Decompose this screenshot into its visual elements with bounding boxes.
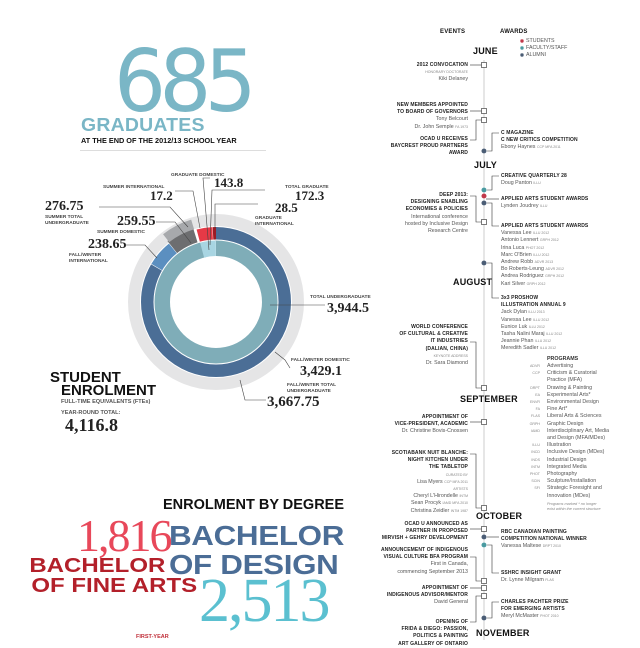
programs legend: FLAS: [531, 414, 540, 418]
heading: student enrolment: FULL-TIME EQUIVALENTS (FTEs): [61, 399, 150, 405]
award: creative quarterly: CREATIVE QUARTERLY 28: [501, 173, 567, 179]
value: fall/winter total undergraduate: [267, 382, 336, 410]
label: bachelor of design: OF DESIGN: [169, 549, 338, 580]
event: board of governors: TO BOARD OF GOVERNORS: [397, 109, 468, 115]
event: deep 2013: International conference: [411, 214, 468, 220]
award: 3x3 proshow: [501, 295, 566, 351]
award: sshrc: [501, 570, 562, 583]
award: applied arts 2: Irina Luca PHOT 2012: [501, 245, 544, 251]
label: first-year: FIRST-YEAR: [136, 634, 169, 640]
award: 3x3 proshow: Jack Dylan ILLU 2013: [501, 309, 545, 315]
event: nuit blanche: Cheryl L'Hirondelle INTM: [413, 493, 468, 499]
event: nuit blanche: SCOTIABANK NUIT BLANCHE:: [392, 450, 468, 456]
value: summer international: 17.2: [150, 188, 173, 203]
event: nuit blanche: NIGHT KITCHEN UNDER: [408, 457, 468, 463]
value: summer total undergraduate: UNDERGRADUATE: [45, 220, 89, 226]
legend: [526, 38, 568, 58]
award: c magazine: [501, 130, 578, 150]
programs legend: Drawing & Painting: [547, 385, 592, 391]
heading: student enrolment: YEAR-ROUND TOTAL:: [61, 410, 120, 416]
number: 2,513 BDes: 2,513: [199, 567, 328, 635]
award: 3x3 proshow: Meredith Sadler ILLU 2012: [501, 345, 556, 351]
award: 3x3 proshow: 3x3 PROSHOW: [501, 295, 538, 301]
event: board of governors: NEW MEMBERS APPOINTED: [397, 102, 468, 108]
event: world conference: (DALIAN, CHINA): [426, 346, 468, 352]
award: applied arts 2: Andrea Rodriguez GRPH 2012: [501, 273, 564, 279]
programs legend: Practice (MFA): [547, 377, 582, 383]
label: total graduate: TOTAL GRADUATE: [285, 185, 329, 190]
value: total undergraduate: TOTAL UNDERGRADUATE: [310, 295, 371, 300]
number: 1,816 BFA: 1,816: [77, 510, 170, 561]
event: board of governors: Dr. John Semple FA 1973: [414, 124, 468, 130]
event: frida & diego: ART GALLERY OF ONTARIO: [398, 641, 468, 647]
label: bachelor of fine arts: [29, 555, 197, 597]
programs legend: Photography: [547, 471, 577, 477]
event: vp academic: Dr. Christine Bovis-Cnossen: [402, 428, 468, 434]
event: indigenous bfa: VISUAL CULTURE BFA PROGRAM: [384, 554, 468, 560]
event: vp academic: [394, 414, 468, 434]
event: world conference: KEYNOTE ADDRESS: [434, 354, 468, 358]
month: august: AUGUST: [453, 277, 492, 287]
event: indigenous bfa: commencing September 2013: [397, 569, 468, 575]
legend: ALUMNI: [526, 52, 546, 58]
value: graduate international: [255, 200, 298, 226]
programs legend: Advertising: [547, 363, 573, 369]
label graduates: GRADUATES: [81, 115, 205, 135]
event: world conference: OF CULTURAL & CREATIVE: [399, 331, 468, 337]
value: summer total undergraduate: 276.75: [45, 199, 84, 214]
event: baycrest: AWARD: [449, 150, 468, 156]
value: total graduate: 172.3: [295, 188, 324, 203]
event: nuit blanche: [392, 450, 468, 514]
programs legend: Interdisciplinary Art, Media: [547, 428, 609, 434]
event: mirvish gehry: PARTNER IN PROPOSED: [406, 528, 468, 534]
label: bachelor of fine arts: BACHELOR: [29, 555, 165, 577]
value: fall/winter international: [69, 237, 126, 264]
award: charles pachter: [501, 599, 569, 619]
value: graduate international: 28.5: [275, 200, 298, 215]
programs legend: Integrated Media: [547, 464, 587, 470]
award: applied arts 2: Bo Roberts-Leung ADVR 2012: [501, 266, 564, 272]
value: summer domestic: SUMMER DOMESTIC: [97, 230, 145, 235]
award: 3x3 proshow: Tasha Nalini Maraj ILLU 2012: [501, 331, 562, 337]
donut chart: student enrolment: [99, 178, 325, 400]
value: fall/winter total undergraduate: UNDERGRADUATE: [287, 388, 331, 394]
award: applied arts 1: Lynden Joudrey ILLU: [501, 203, 547, 209]
value: fall/winter total undergraduate: FALL/WINTER TOTAL: [287, 383, 336, 388]
programs legend: SFI: [534, 486, 540, 490]
month: october: OCTOBER: [476, 511, 522, 521]
event: world conference: [399, 324, 468, 366]
programs legend: GRPH: [530, 422, 540, 426]
big number 685: 685: [114, 32, 250, 132]
event: vp academic: APPOINTMENT OF: [422, 414, 468, 420]
title: 685 graduates: [80, 32, 266, 151]
programs legend: Industrial Design: [547, 457, 586, 463]
programs legend: IAMD: [531, 429, 540, 433]
event: board of governors: Tony Belcourt: [436, 116, 468, 122]
event: frida & diego: [398, 619, 468, 647]
event: deep 2013: ECONOMIES & POLICIES: [406, 206, 468, 212]
programs legend: Fine Art*: [547, 406, 567, 412]
programs legend: DRPT: [530, 386, 540, 390]
award: c magazine: Ebony Haynes CCP MFA 2011: [501, 144, 561, 150]
event: nuit blanche: THE TABLETOP: [429, 464, 468, 470]
event: indigenous bfa: First in Canada,: [431, 561, 468, 567]
event: indigenous advisor: APPOINTMENT OF: [422, 585, 468, 591]
event: deep 2013: DEEP 2013:: [439, 192, 468, 198]
value: fall/winter international: 238.65: [88, 237, 126, 252]
value: fall/winter domestic: FALL/WINTER DOMESTIC: [291, 358, 350, 363]
event: baycrest: [391, 136, 468, 156]
programs legend: INDS: [531, 458, 540, 462]
value: summer total undergraduate: SUMMER TOTAL: [45, 215, 83, 220]
award: c magazine: C MAGAZINE: [501, 130, 534, 136]
value: fall/winter total undergraduate: 3,667.75: [267, 394, 320, 410]
programs legend: Experimental Arts*: [547, 392, 591, 398]
award: applied arts 2: Vanessa Lee ILLU 2012: [501, 230, 549, 236]
value: summer domestic: [97, 214, 156, 235]
award: applied arts 2: Marc O'Brien ILLU 2012: [501, 252, 549, 258]
event: board of governors: [397, 102, 468, 130]
programs legend: SCIN: [531, 479, 540, 483]
event: convocation: [416, 62, 468, 82]
value: total undergraduate: [310, 295, 371, 316]
programs legend: INCD: [531, 450, 540, 454]
event: frida & diego: POLITICS & PAINTING: [413, 633, 468, 639]
label: bachelor of design: [169, 520, 344, 580]
event: frida & diego: OPENING OF: [436, 619, 468, 625]
month: june: JUNE: [473, 46, 498, 56]
month: september: SEPTEMBER: [460, 394, 518, 404]
event: convocation: HONORARY DOCTORATE: [425, 70, 468, 74]
programs legend: Environmental Design: [547, 399, 599, 405]
event: mirvish gehry: [382, 521, 468, 541]
event: nuit blanche: Lisa Myers CCP MFA 2011: [417, 479, 468, 485]
award: creative quarterly: [501, 173, 567, 186]
value: graduate international: INTERNATIONAL: [255, 222, 294, 226]
subtitle: AT THE END OF THE 2012/13 SCHOOL YEAR: [81, 136, 237, 145]
event: convocation: Kiki Delaney: [439, 76, 468, 82]
event: indigenous advisor: David General: [434, 599, 468, 605]
header: events: EVENTS: [440, 29, 465, 35]
programs legend: Sculpture/Installation: [547, 478, 596, 484]
event: nuit blanche: ARTISTS: [453, 487, 468, 491]
award: 3x3 proshow: Jeannie Phan ILLU 2012: [501, 338, 551, 344]
programs legend: ENVR: [530, 400, 540, 404]
award: creative quarterly: Doug Panton ILLU: [501, 180, 541, 186]
event: deep 2013: Research Centre: [428, 228, 468, 234]
event: baycrest: BAYCREST PROUD PARTNERS: [391, 143, 468, 149]
programs legend: Graphic Design: [547, 421, 584, 427]
value: graduate domestic: 143.8: [214, 175, 243, 190]
programs legend: ILLU: [532, 443, 540, 447]
heading: student enrolment: STUDENT: [50, 369, 121, 386]
timeline: events and awards: [470, 39, 524, 640]
value: graduate international: GRADUATE: [255, 216, 282, 221]
programs legend: [530, 356, 610, 511]
value: fall/winter domestic: 3,429.1: [300, 364, 342, 379]
programs legend: Innovation (MDes): [547, 493, 590, 499]
event: indigenous bfa: ANNOUNCEMENT OF INDIGENOUS: [381, 547, 468, 553]
programs legend: Strategic Foresight and: [547, 485, 602, 491]
heading: enrolment by degree: ENROLMENT BY DEGREE: [163, 497, 344, 513]
award: 3x3 proshow: Vanessa Lee ILLU 2012: [501, 317, 549, 323]
event: nuit blanche: Christina Zeidler INTM 1987: [411, 508, 468, 514]
heading: student enrolment: [50, 369, 156, 435]
event: world conference: IT INDUSTRIES: [431, 338, 468, 344]
value: summer domestic: 259.55: [117, 214, 156, 229]
award: applied arts 2: Antonio Lennert GRPH 2012: [501, 237, 559, 243]
value: fall/winter international: INTERNATIONAL: [69, 258, 108, 264]
award: 3x3 proshow: ILLUSTRATION ANNUAL 9: [501, 302, 566, 308]
programs legend: CCP: [532, 371, 540, 375]
award: charles pachter: CHARLES PACHTER PRIZE: [501, 599, 569, 605]
legend: STUDENTS: [526, 38, 555, 44]
event: deep 2013: DESIGNING ENABLING: [411, 199, 468, 205]
heading: student enrolment: 4,116.8: [65, 415, 118, 435]
value: fall/winter domestic: [291, 358, 350, 379]
award: c magazine: C NEW CRITICS COMPETITION: [501, 137, 578, 143]
value: fall/winter international: FALL/WINTER: [69, 253, 101, 258]
award: rbc painting: [501, 529, 587, 549]
legend: FACULTY/STAFF: [526, 45, 567, 51]
event: mirvish gehry: OCAD U ANNOUNCED AS: [405, 521, 468, 527]
award: rbc painting: COMPETITION NATIONAL WINNER: [501, 536, 587, 542]
award: sshrc: SSHRC INSIGHT GRANT: [501, 570, 561, 576]
award: applied arts 1: APPLIED ARTS STUDENT AWARDS: [501, 196, 588, 202]
event: mirvish gehry: MIRVISH + GEHRY DEVELOPMENT: [382, 535, 468, 541]
award: sshrc: Dr. Lynne Milgram FLAS: [501, 577, 554, 583]
programs legend: INTM: [531, 465, 540, 469]
award: charles pachter: FOR EMERGING ARTISTS: [501, 606, 565, 612]
award: applied arts 2: Andrew Robb ADVR 2013: [501, 259, 553, 265]
event: indigenous advisor: INDIGENOUS ADVISOR/MENTOR: [387, 592, 468, 598]
heading: student enrolment: ENROLMENT: [61, 382, 156, 398]
award: applied arts 2: APPLIED ARTS STUDENT AWARDS: [501, 223, 588, 229]
programs legend: Illustration: [547, 442, 571, 448]
programs legend: FA: [536, 407, 540, 411]
event: baycrest: OCAD U RECEIVES: [420, 136, 468, 142]
programs legend: PROGRAMS: [547, 356, 578, 362]
value: summer total undergraduate: [45, 199, 89, 226]
event: nuit blanche: CURATED BY: [446, 473, 468, 477]
award: rbc painting: Vanessa Maltese DRPT 2010: [501, 543, 561, 549]
event: convocation: 2012 CONVOCATION: [417, 62, 468, 68]
programs legend: ADVR: [530, 364, 540, 368]
programs legend: Inclusive Design (MDes): [547, 449, 604, 455]
month: november: NOVEMBER: [476, 628, 530, 638]
award: charles pachter: Meryl McMaster PHOT 2010: [501, 613, 559, 619]
label: summer international: SUMMER INTERNATIONAL: [103, 185, 164, 190]
programs legend: exist within the current structure: [547, 507, 601, 511]
event: deep 2013: [405, 192, 468, 234]
programs legend: EA: [535, 393, 540, 397]
programs legend: Programs marked * no longer: [547, 502, 597, 506]
award: applied arts 1: [501, 196, 588, 209]
programs legend: Criticism & Curatorial: [547, 370, 597, 376]
event: world conference: WORLD CONFERENCE: [411, 324, 468, 330]
award: rbc painting: RBC CANADIAN PAINTING: [501, 529, 567, 535]
value: total undergraduate: 3,944.5: [327, 301, 369, 316]
programs legend: Liberal Arts & Sciences: [547, 413, 601, 419]
programs legend: PHOT: [530, 472, 540, 476]
event: deep 2013: hosted by Inclusive Design: [405, 221, 468, 227]
award: applied arts 2: [501, 223, 588, 287]
event: frida & diego: FRIDA & DIEGO: PASSION,: [402, 626, 468, 632]
event: nuit blanche: Sean Procyk IAMD MFA 2010: [411, 500, 468, 506]
label: graduate domestic: GRADUATE DOMESTIC: [171, 173, 224, 178]
label: bachelor of fine arts: OF FINE ARTS: [31, 575, 197, 597]
programs legend: and Design (MFA/MDes): [547, 435, 605, 441]
event: vp academic: VICE-PRESIDENT, ACADEMIC: [395, 421, 468, 427]
month: july: JULY: [474, 160, 497, 170]
header: awards: AWARDS: [500, 29, 528, 35]
event: world conference: Dr. Sara Diamond: [426, 360, 468, 366]
label: bachelor of design: BACHELOR: [169, 520, 344, 551]
event: indigenous bfa: [381, 547, 468, 575]
event: indigenous advisor: [387, 585, 468, 605]
award: 3x3 proshow: Eunice Luk ILLU 2012: [501, 324, 545, 330]
award: applied arts 2: Kari Silver GRPH 2012: [501, 281, 545, 287]
